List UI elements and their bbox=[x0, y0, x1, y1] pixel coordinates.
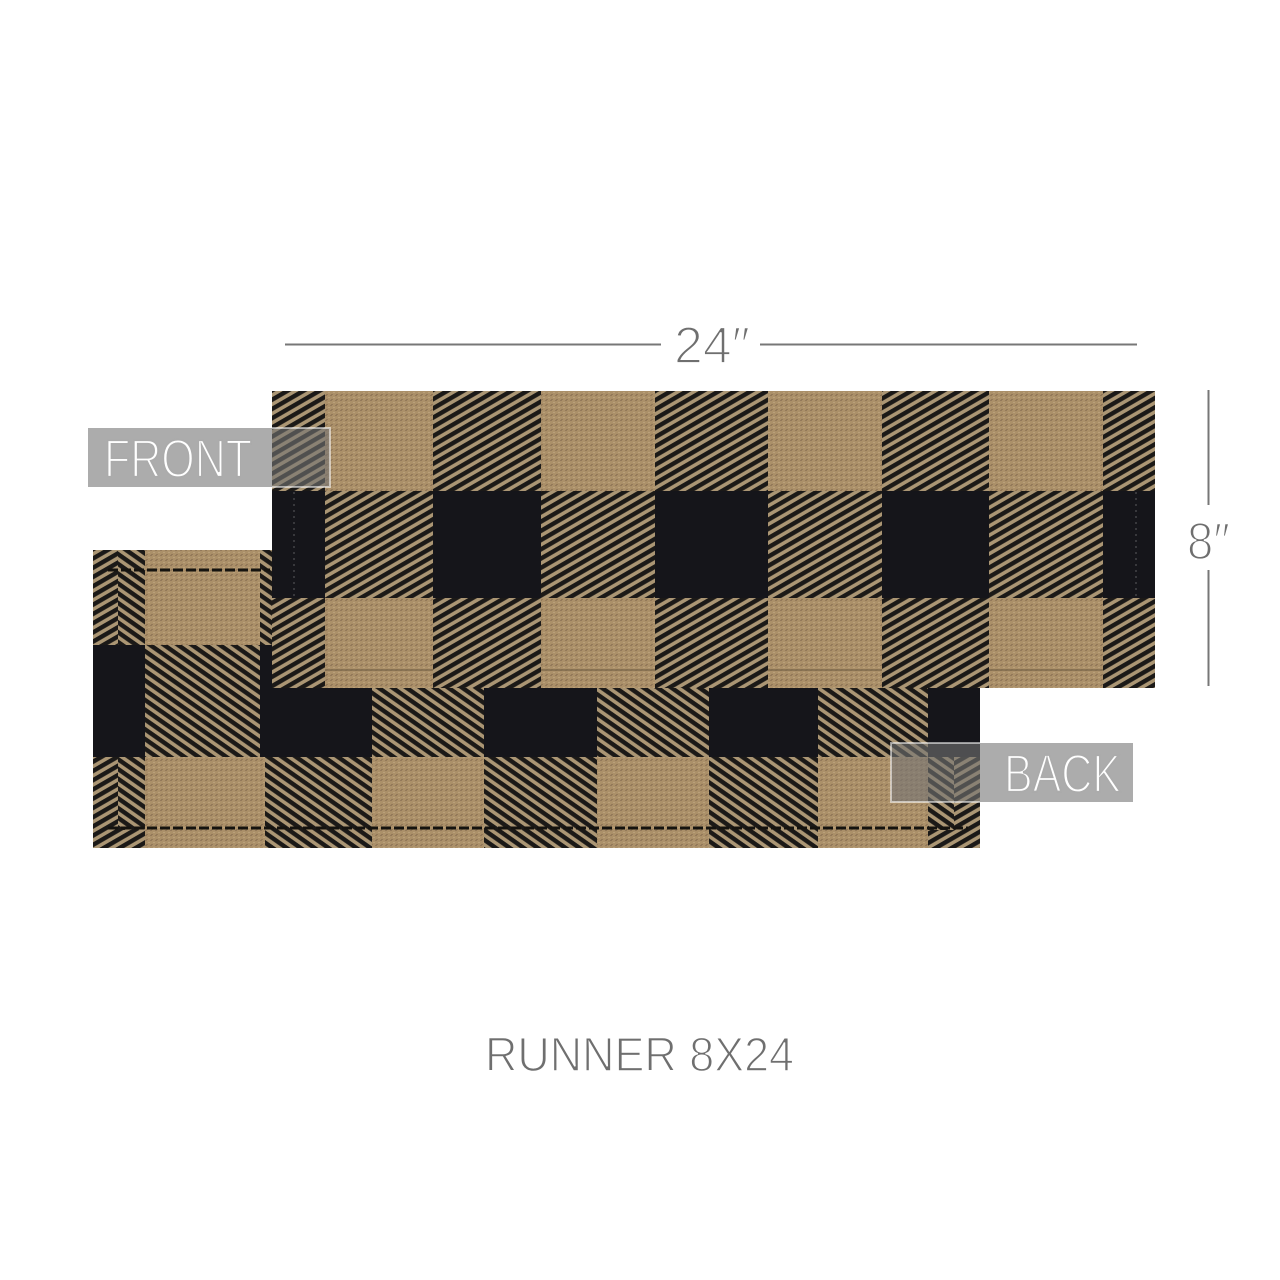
label: BACK: BACK bbox=[1004, 744, 1121, 804]
label: BACK bbox=[891, 743, 1133, 804]
dimension: height 8 inches: 8″ bbox=[1187, 513, 1230, 571]
back runner bbox=[93, 550, 980, 848]
label: FRONT: FRONT bbox=[104, 429, 252, 489]
caption: RUNNER 8X24 bbox=[485, 1029, 794, 1082]
front runner bbox=[272, 391, 1155, 688]
dimension: width 24 inches: 24″ bbox=[674, 317, 750, 375]
